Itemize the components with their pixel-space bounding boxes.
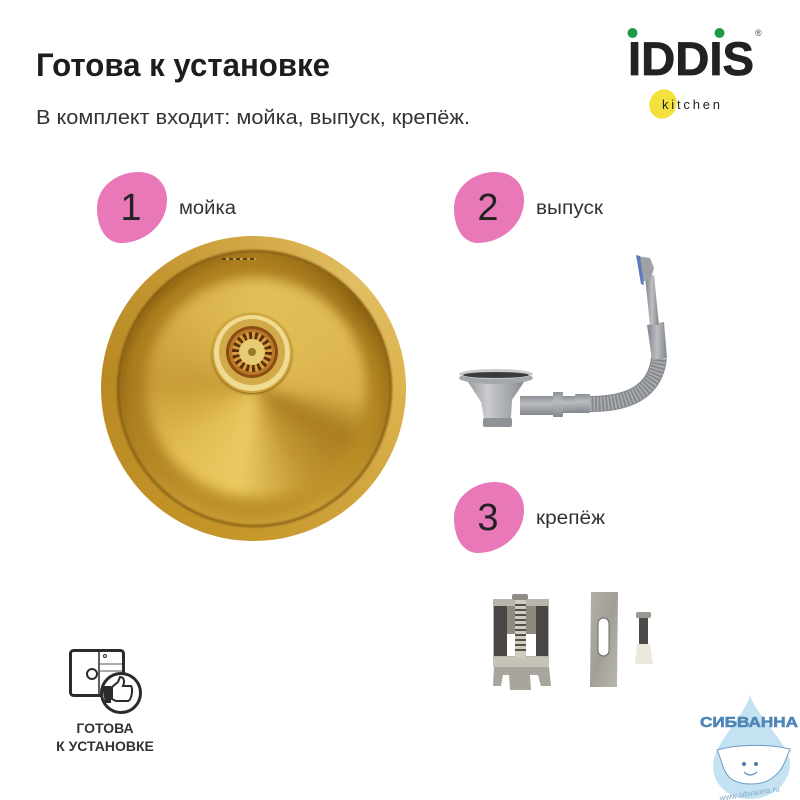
title: Готова к установке	[36, 47, 330, 83]
badge 3 and label: крепёж	[536, 508, 605, 529]
screw with plug	[635, 612, 653, 664]
icon: ready to install	[70, 650, 140, 712]
logo: IDDIS kitchen: IDDIS	[628, 32, 754, 85]
logo: IDDIS kitchen	[628, 28, 762, 123]
badge 2 and label: выпуск	[536, 198, 604, 219]
sink photo	[101, 236, 406, 541]
watermark logo: Sibvanna	[700, 695, 798, 800]
logo: IDDIS kitchen: ®	[755, 28, 762, 38]
badge 2 and label: 2	[477, 187, 499, 229]
mounting clip	[493, 594, 551, 690]
watermark logo: Sibvanna: СИБВАННА	[700, 714, 798, 731]
drain	[212, 313, 292, 393]
badge 2 and label	[454, 172, 604, 243]
icon caption: ГОТОВА	[76, 720, 134, 736]
icon caption: К УСТАНОВКЕ	[56, 738, 154, 754]
badge 1 and label: мойка	[179, 198, 236, 219]
drain assembly	[459, 255, 667, 427]
badge 1 and label	[97, 172, 236, 243]
logo: IDDIS kitchen: kitchen	[662, 97, 720, 112]
icon caption	[56, 720, 154, 754]
badge 3 and label	[454, 482, 605, 553]
badge 1 and label: 1	[120, 187, 142, 229]
subtitle: В комплект входит: мойка, выпуск, крепёж.	[36, 107, 470, 129]
badge 3 and label: 3	[477, 497, 499, 539]
mounting plate with slot	[590, 592, 618, 687]
